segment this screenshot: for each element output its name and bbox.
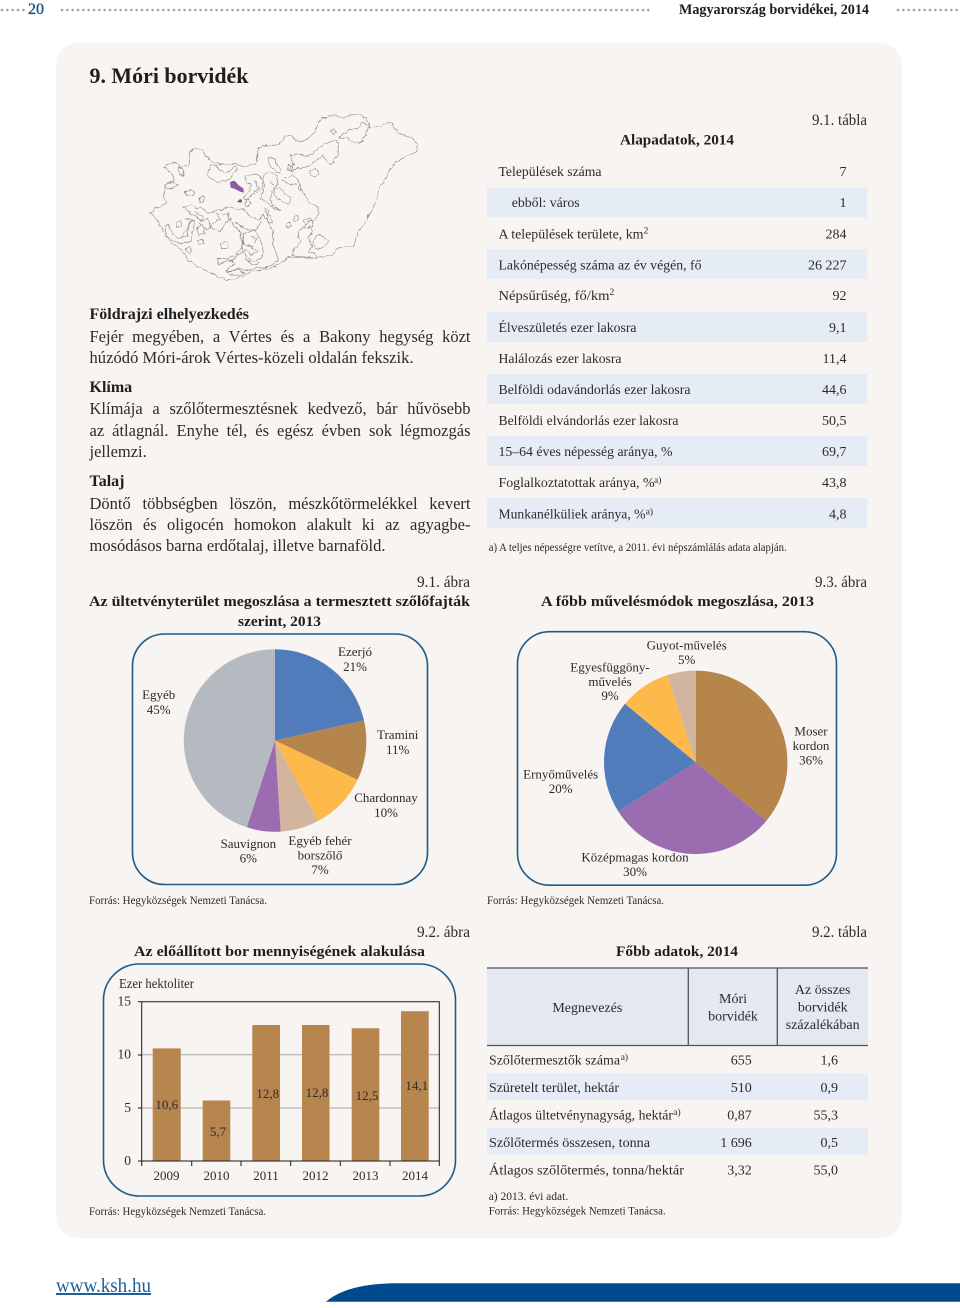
table 9.1: 92: [832, 289, 846, 304]
bar chart: wine production: 2011: [253, 1168, 279, 1183]
table 9.2: 55,3: [814, 1108, 838, 1124]
table 9.2: a): [621, 1052, 628, 1063]
bar chart: wine production: 5,7: [210, 1124, 227, 1139]
bar chart: wine production: 2014: [402, 1168, 428, 1183]
table 9.2: a): [673, 1107, 681, 1118]
pie chart 9.3: training systems: Középmagas kordon: [581, 850, 689, 864]
table 9.2: 1 696: [720, 1136, 752, 1151]
pie chart 9.3: training systems: kordon: [793, 738, 830, 753]
heading: climate: Klíma: [90, 379, 132, 396]
pie chart 9.3: training systems: Moser: [794, 724, 828, 738]
pie chart 9.3: training systems: 9%: [601, 688, 619, 703]
pie chart 9.3: training systems: 20%: [549, 781, 573, 796]
table 9.2: borvidék: [708, 1010, 758, 1024]
table 9.1: 4,8: [829, 508, 846, 522]
region highlight: small part: [237, 199, 242, 203]
table 9.1: 1: [840, 196, 846, 211]
table 9.1: Belföldi odavándorlás ezer lakosra: [498, 383, 691, 398]
paragraph: soil: [90, 494, 470, 555]
pie chart 9.3: training systems: Ernyőművelés: [523, 766, 598, 782]
table 9.2: 9.2. tábla: [812, 924, 867, 941]
table 9.1: Népsűrűség, fő/km: [498, 289, 610, 304]
bar chart: wine production: 14,1: [405, 1078, 428, 1093]
table 9.1: Halálozás ezer lakosra: [498, 352, 622, 367]
pie chart 9.1 heading: 9.1. ábra: [417, 574, 470, 591]
table 9.1: 43,8: [822, 476, 846, 491]
pie chart 9.1: grape varieties: 11%: [386, 742, 410, 757]
paragraph: soil: Döntő többségben löszön, mészkőtörmelékkel kevert: [90, 494, 470, 513]
table 9.2: 55,0: [814, 1164, 838, 1178]
bar chart: wine production: 2013: [352, 1168, 378, 1183]
bar chart: wine production: Ezer hektoliter: [119, 976, 194, 991]
table 9.1: Belföldi elvándorlás ezer lakosra: [498, 414, 679, 429]
table 9.1: 50,5: [822, 414, 846, 429]
table 9.2: százalékában: [786, 1018, 860, 1033]
running header: Magyarország borvidékei, 2014: [679, 2, 869, 18]
paragraph: climate: Klímája a szőlőtermesztésnek kedvező, bár hűvösebb: [90, 399, 470, 418]
table 9.1: 15–64 éves népesség aránya, %: [498, 445, 673, 460]
text block: region description: [89, 306, 470, 555]
pie chart 9.1 heading: Az ültetvényterület megoszlása a termesztett szőlőfajták: [89, 594, 471, 610]
table 9.1: 2: [610, 288, 614, 298]
pie chart 9.3: training systems: Egyesfüggöny-: [570, 660, 650, 674]
table 9.2: Az összes: [795, 983, 851, 998]
table 9.1: 11,4: [823, 352, 846, 367]
pie chart 9.1: grape varieties: Egyéb: [142, 687, 175, 702]
pie chart 9.1: grape varieties: Sauvignon: [220, 836, 277, 851]
table 9.1: [487, 112, 868, 554]
table 9.1: Foglalkoztatottak aránya, %: [498, 476, 655, 491]
table 9.2: 510: [731, 1081, 752, 1096]
bar chart: wine production: 12,8: [306, 1085, 328, 1100]
table 9.2: Átlagos szőlőtermés, tonna/hektár: [489, 1162, 684, 1178]
paragraph: location: húzódó Móri-árok Vértes-közeli oldalán fekszik.: [90, 348, 414, 367]
table 9.1: 44,6: [822, 383, 846, 398]
pie chart 9.1: grape varieties: Ezerjó: [338, 644, 372, 659]
table 9.2: Móri: [719, 992, 747, 1007]
pie chart 9.3: training systems: [518, 632, 836, 885]
table 9.1 label: 9.1. tábla: [812, 112, 867, 129]
bar chart: wine production: 10,6: [155, 1097, 179, 1112]
table 9.1: a): [654, 475, 661, 486]
bar chart: wine production: 2010: [204, 1168, 230, 1183]
bar chart: wine production: 15: [118, 994, 131, 1008]
bar chart heading: [134, 924, 470, 960]
table 9.2: 0,87: [727, 1108, 752, 1124]
table 9.2: Szőlőtermés összesen, tonna: [489, 1136, 651, 1151]
table 9.2: 0,9: [820, 1081, 838, 1096]
paragraph: climate: [89, 399, 470, 461]
table 9.1: a): [646, 506, 653, 518]
table 9.2: Forrás: Hegyközségek Nemzeti Tanácsa.: [489, 1206, 666, 1218]
heading: location: Földrajzi elhelyezkedés: [90, 306, 249, 323]
region highlight: Mór: [230, 181, 244, 193]
table 9.2: Szőlőtermesztők száma: [489, 1054, 621, 1068]
pie chart 9.1: grape varieties: 21%: [343, 659, 367, 674]
table 9.2: Főbb adatok, 2014: [616, 944, 739, 960]
bar chart heading: 9.2. ábra: [417, 924, 470, 941]
table 9.1: 26 227: [808, 258, 846, 274]
table 9.1: 69,7: [822, 445, 846, 460]
footer link: www.ksh.hu: [56, 1275, 151, 1297]
bar chart: wine production: 5: [124, 1100, 131, 1115]
paragraph: soil: löszön és oligocén homokon alakult ki az agyagbe-: [90, 515, 470, 534]
pie chart 9.1 heading: szerint, 2013: [238, 614, 321, 630]
pie chart 9.3: training systems: Guyot-művelés: [647, 638, 727, 652]
map of Hungary wine regions: [150, 114, 418, 280]
source note: Forrás: Hegyközségek Nemzeti Tanácsa.: [89, 895, 267, 907]
table 9.2: 1,6: [820, 1054, 838, 1068]
table 9.2: 3,32: [727, 1164, 752, 1178]
table 9.1: Települések száma: [498, 165, 602, 180]
table 9.1: 9,1: [829, 321, 846, 336]
table 9.1: Munkanélküliek aránya, %: [498, 508, 646, 522]
table 9.2: [487, 924, 868, 1218]
bar chart: wine production: [104, 964, 456, 1196]
footer band: [326, 1283, 960, 1302]
table 9.1: 7: [840, 165, 846, 180]
pie chart 9.3 heading: 9.3. ábra: [815, 574, 867, 591]
heading: soil: Talaj: [90, 473, 124, 490]
table 9.1: Lakónépesség száma az év végén, fő: [498, 258, 702, 274]
pie chart 9.1: grape varieties: [132, 634, 428, 884]
bar chart: wine production: 10: [118, 1046, 131, 1062]
table 9.1: 2: [644, 226, 648, 236]
table 9.1 title: Alapadatok, 2014: [620, 132, 734, 148]
table 9.1: 284: [826, 228, 846, 242]
bar chart heading: Az előállított bor mennyiségének alakulása: [134, 944, 426, 960]
pie chart 9.1: grape varieties: 7%: [311, 862, 329, 877]
paragraph: climate: az átlagnál. Enyhe tél, és egész évben sok légmozgás: [90, 421, 470, 440]
pie chart 9.3: training systems: 5%: [678, 652, 696, 667]
table 9.1: Élveszületés ezer lakosra: [498, 319, 637, 336]
pie chart 9.1: grape varieties: borszőlő: [298, 848, 342, 862]
source note: Forrás: Hegyközségek Nemzeti Tanácsa.: [89, 1206, 266, 1218]
paragraph: location: Fejér megyében, a Vértes és a Bakony hegység közt: [90, 327, 470, 346]
table 9.2: Megnevezés: [552, 1001, 622, 1016]
pie chart 9.3: training systems: 36%: [799, 752, 823, 768]
table 9.2: 655: [731, 1054, 752, 1068]
table 9.2: Szüretelt terület, hektár: [489, 1081, 619, 1096]
bar chart: wine production: 12,8: [256, 1086, 279, 1101]
pie chart 9.1: grape varieties: 10%: [374, 805, 398, 820]
pie chart 9.3 heading: [541, 574, 867, 610]
table 9.1 footnote: a) A teljes népességre vetítve, a 2011. évi népszámlálás adata alapján.: [489, 542, 787, 554]
paragraph: soil: mosódásos barna erdőtalaj, illetve barnaföld.: [90, 536, 386, 555]
pie chart 9.1: grape varieties: 45%: [147, 702, 171, 717]
bar chart: wine production: 2012: [302, 1168, 328, 1183]
paragraph: location: [90, 327, 470, 367]
table 9.1: ebből: város: [512, 196, 580, 211]
pie chart 9.1: grape varieties: 6%: [240, 850, 257, 866]
pie chart 9.3 heading: A főbb művelésmódok megoszlása, 2013: [541, 594, 814, 610]
bar chart: wine production: 12,5: [356, 1088, 378, 1103]
table 9.1: A települések területe, km: [498, 228, 644, 242]
bar chart: wine production: 0: [124, 1153, 131, 1168]
source note: Forrás: Hegyközségek Nemzeti Tanácsa.: [487, 895, 664, 907]
table 9.2: Átlagos ültetvénynagyság, hektár: [489, 1106, 673, 1124]
bar chart: wine production: 2009: [154, 1168, 180, 1183]
paragraph: climate: jellemzi.: [90, 442, 147, 461]
table 9.2: borvidék: [798, 1000, 848, 1016]
pie chart 9.1 heading: [89, 574, 471, 630]
table 9.2: 0,5: [820, 1136, 838, 1151]
pie chart 9.3: training systems: művelés: [588, 674, 632, 689]
pie chart 9.3: training systems: 30%: [623, 864, 647, 879]
pie chart 9.1: grape varieties: Egyéb fehér: [288, 833, 352, 848]
table 9.2: a) 2013. évi adat.: [489, 1191, 568, 1203]
page number: 20: [28, 1, 44, 18]
title: 9. Móri borvidék: [90, 63, 249, 88]
pie chart 9.1: grape varieties: Chardonnay: [354, 790, 418, 805]
pie chart 9.1: grape varieties: Tramini: [377, 727, 419, 742]
